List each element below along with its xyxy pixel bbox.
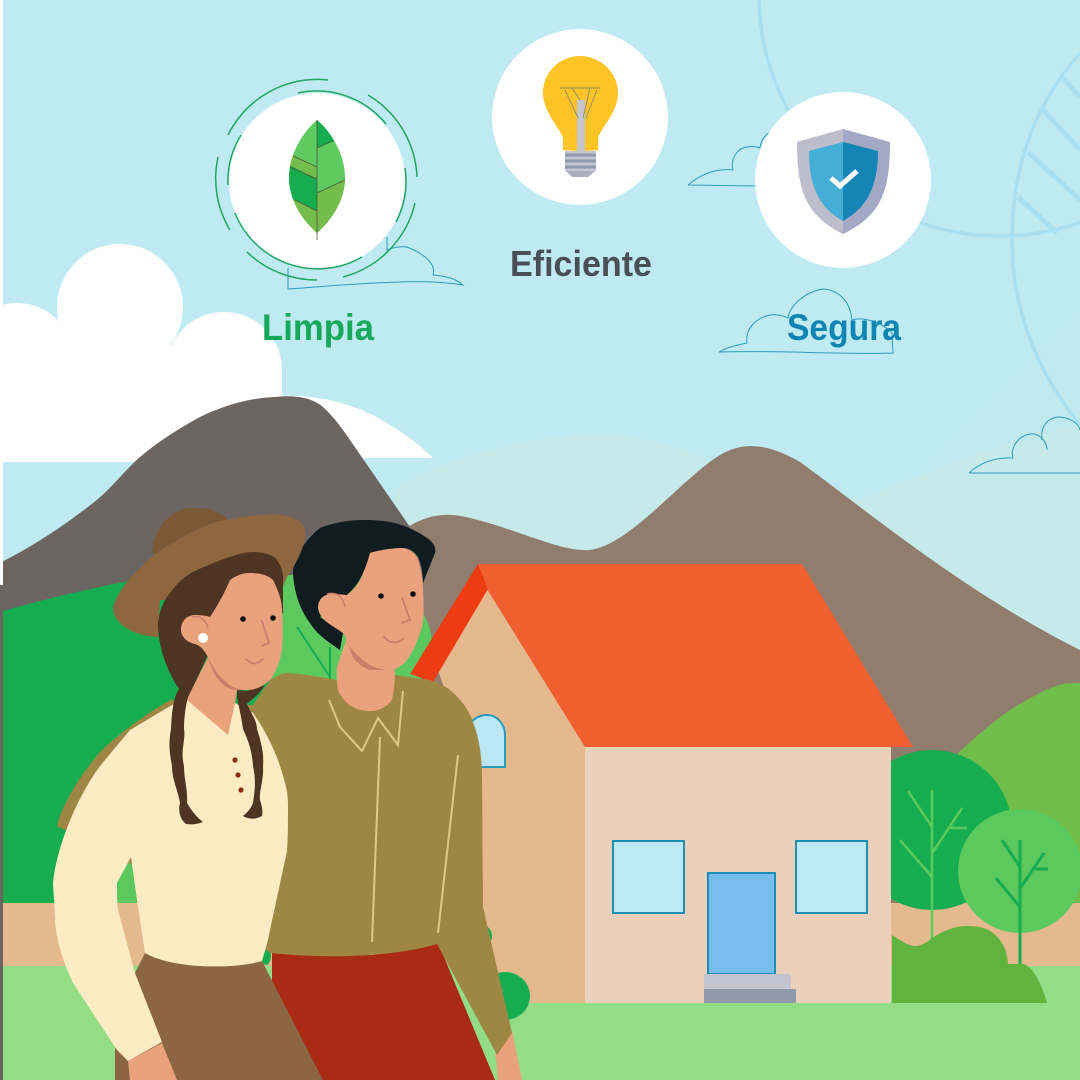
woman right braid <box>237 697 263 819</box>
man collar and seams <box>329 691 458 942</box>
woman hair <box>158 552 283 700</box>
gray mountain <box>0 396 415 700</box>
circle: Eficiente <box>492 29 668 205</box>
woman jaw shadow <box>208 657 247 690</box>
small bushes by house <box>261 925 530 1020</box>
hat brim <box>113 515 305 637</box>
man neck <box>337 638 395 711</box>
outline cloud under Limpia <box>288 237 463 289</box>
door <box>708 873 775 974</box>
woman blouse <box>53 700 288 1061</box>
woman neck <box>185 657 237 735</box>
icon: shield <box>797 129 890 234</box>
woman face <box>181 573 283 690</box>
man hair <box>293 520 435 650</box>
hat crown <box>152 508 230 560</box>
front wall <box>585 747 891 1003</box>
bush <box>892 926 1047 1003</box>
feature: Eficiente <box>492 29 668 284</box>
man eyes <box>378 591 416 599</box>
label: Eficiente: Eficiente <box>510 243 652 284</box>
left edge strip <box>0 0 3 1080</box>
man <box>57 520 522 1080</box>
label: Segura: Segura <box>787 307 901 348</box>
roof <box>478 564 913 747</box>
woman nose and mouth <box>246 621 269 664</box>
outline cloud by Segura <box>719 289 893 353</box>
woman skirt <box>115 953 323 1080</box>
white cloud <box>0 244 433 462</box>
feature: Limpia <box>216 79 417 348</box>
steps <box>704 974 796 1003</box>
side wall <box>436 589 586 1003</box>
man neck shadow <box>347 638 390 670</box>
woman left braid <box>169 685 203 824</box>
circle: Limpia <box>229 93 405 269</box>
pale distant hills <box>395 425 1080 660</box>
man trousers <box>272 940 495 1080</box>
attic window <box>465 715 505 767</box>
woman eyes <box>240 615 276 622</box>
brown mountain <box>400 446 1080 905</box>
dark green left hill <box>0 574 300 905</box>
woman ear line <box>192 617 208 628</box>
label: Limpia: Limpia <box>262 307 374 348</box>
house <box>410 564 913 1003</box>
outline cloud near shield <box>688 132 770 186</box>
man shirt <box>57 673 512 1055</box>
woman buttons <box>232 757 244 793</box>
woman hand <box>128 1043 177 1080</box>
lawn <box>0 966 1080 1080</box>
man face <box>318 548 424 670</box>
man hand <box>495 1030 522 1080</box>
right window <box>796 841 867 913</box>
background decorative circles <box>759 0 1080 425</box>
woman earring <box>198 633 208 643</box>
feature: Segura <box>755 92 931 348</box>
tree behind couple <box>115 575 432 903</box>
dirt band <box>0 903 1080 967</box>
gable stripe <box>410 564 488 682</box>
light tree <box>958 809 1080 965</box>
rings: Limpia <box>216 79 417 280</box>
woman <box>53 508 323 1080</box>
man nose and mouth <box>384 598 410 643</box>
right trees <box>852 750 1080 1003</box>
circle: Segura <box>755 92 931 268</box>
dark tree <box>852 750 1012 940</box>
woman back hair right <box>237 685 265 705</box>
right green hill <box>958 683 1080 905</box>
icon: light bulb <box>543 56 618 177</box>
outline cloud right <box>969 417 1080 473</box>
icon: leaf <box>289 120 346 240</box>
man ear line <box>327 593 345 607</box>
left window <box>613 841 684 913</box>
